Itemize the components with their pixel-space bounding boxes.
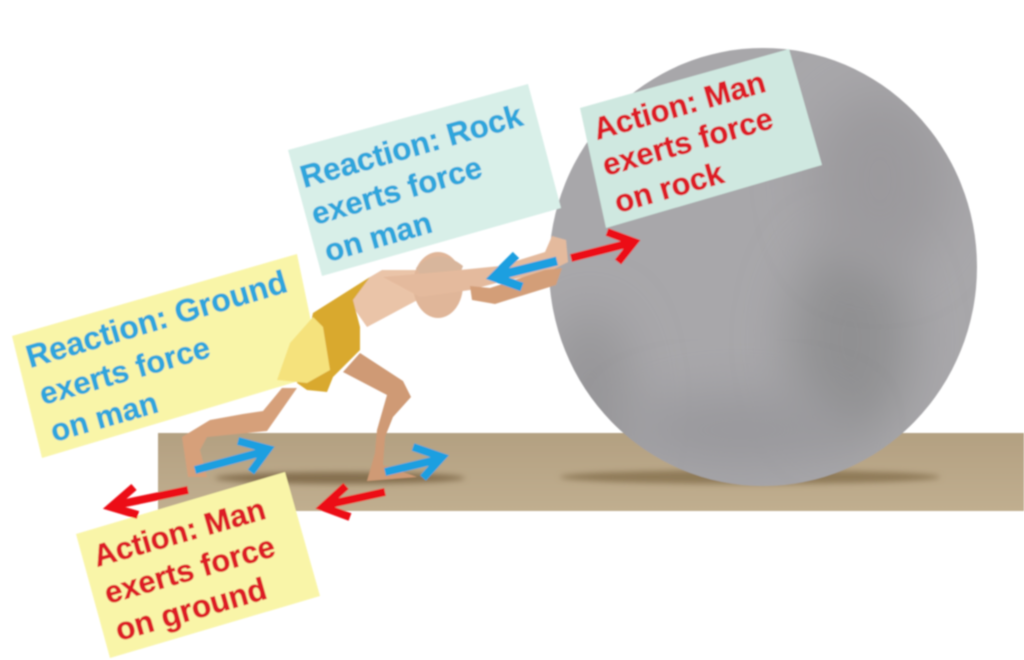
head (413, 252, 463, 318)
label: reaction from ground: exerts force (35, 330, 214, 412)
arrow: ground on front foot (385, 447, 442, 478)
arms (383, 236, 568, 297)
label: action on rock: on rock (610, 155, 728, 220)
front leg (343, 353, 417, 481)
arrow: man on rock (571, 232, 634, 262)
arrow: ground on back foot (195, 441, 268, 472)
label: reaction on man: on man (320, 205, 436, 269)
arrow: rock on man (494, 255, 557, 287)
label: action on rock (580, 49, 822, 228)
label: action on rock: exerts force (598, 101, 777, 183)
torso (353, 270, 425, 327)
arrow: back foot on ground (111, 487, 188, 515)
label: reaction on man: exerts force (307, 150, 486, 232)
ground slab (158, 433, 1024, 511)
hair (416, 256, 463, 274)
back leg (182, 388, 297, 477)
label: action on ground (76, 472, 320, 658)
tunic (297, 277, 370, 392)
label: action on ground: exerts force (100, 529, 279, 611)
label: action on rock: Action: Man (589, 64, 769, 147)
man pushing (182, 236, 568, 481)
label: reaction on man (288, 84, 561, 276)
label: reaction from ground: on man (46, 385, 162, 449)
tunic light panel (277, 317, 330, 383)
boulder (540, 40, 985, 490)
label: reaction from ground: Reaction: Ground (22, 263, 291, 375)
label: reaction on man: Reaction: Rock (296, 97, 527, 195)
label: reaction from ground (12, 254, 322, 458)
arrow: front foot on ground (323, 486, 385, 517)
label: action on ground: on ground (111, 570, 271, 648)
label: action on ground: Action: Man (89, 491, 269, 574)
